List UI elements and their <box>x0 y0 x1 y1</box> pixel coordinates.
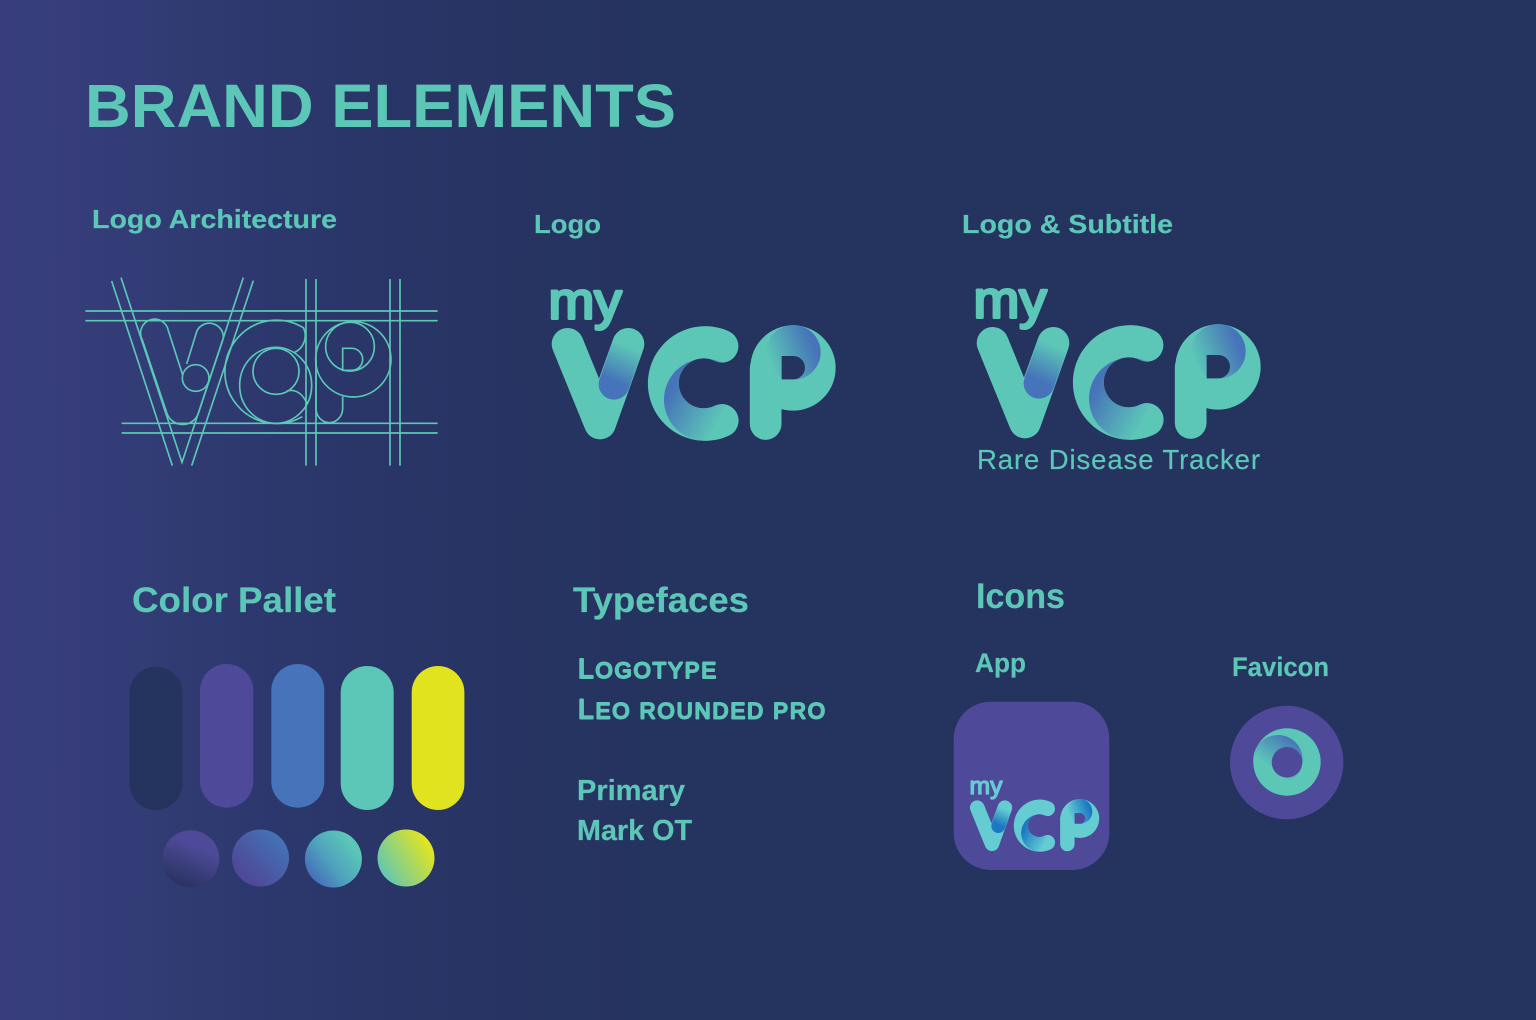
swatch: blue <box>271 664 324 808</box>
heading: logo: Logo <box>534 209 601 239</box>
favicon <box>1230 706 1343 819</box>
letter C <box>1073 325 1171 440</box>
logo <box>550 289 836 441</box>
gradient swatch: purple to blue <box>232 830 289 886</box>
app icon <box>954 702 1109 870</box>
logo architecture construction drawing <box>85 278 438 466</box>
subtitle: Rare Disease Tracker <box>977 444 1260 475</box>
logo with subtitle <box>976 288 1261 470</box>
gradient swatch: navy to purple <box>162 830 219 887</box>
letter P <box>1060 799 1099 844</box>
color palette swatches <box>130 664 464 888</box>
my: my <box>549 272 622 330</box>
typeface: mark ot: Mark OT <box>577 815 692 847</box>
heading: color pallet: Color Pallet <box>132 581 336 620</box>
typeface: leo rounded pro: LEO ROUNDED PRO <box>578 694 825 724</box>
letter V <box>568 344 628 423</box>
letter C <box>1014 800 1058 852</box>
swatch: yellow <box>412 666 464 810</box>
my: my <box>974 271 1047 329</box>
typeface: logotype: LOGOTYPE <box>578 653 716 684</box>
heading: logo and subtitle: Logo & Subtitle <box>962 209 1173 239</box>
heading: app: App <box>975 648 1026 678</box>
letter P <box>750 325 836 424</box>
swatch: purple <box>200 664 253 808</box>
gradient swatch: teal to yellow <box>378 830 434 886</box>
my: my <box>970 773 1002 800</box>
heading: favicon: Favicon <box>1232 652 1329 682</box>
heading: typefaces: Typefaces <box>573 581 749 620</box>
gradient swatch: blue to teal <box>305 830 362 888</box>
heading: icons: Icons <box>976 577 1065 616</box>
letter C <box>648 326 746 441</box>
typeface list <box>577 653 825 847</box>
title: BRAND ELEMENTS <box>85 72 676 140</box>
letter V <box>993 343 1053 422</box>
heading: logo architecture: Logo Architecture <box>92 204 337 234</box>
letter P <box>1175 324 1261 423</box>
typeface: primary: Primary <box>577 775 685 807</box>
swatch: navy <box>130 667 182 810</box>
letter V <box>977 808 1005 844</box>
swatch: teal <box>341 666 394 810</box>
